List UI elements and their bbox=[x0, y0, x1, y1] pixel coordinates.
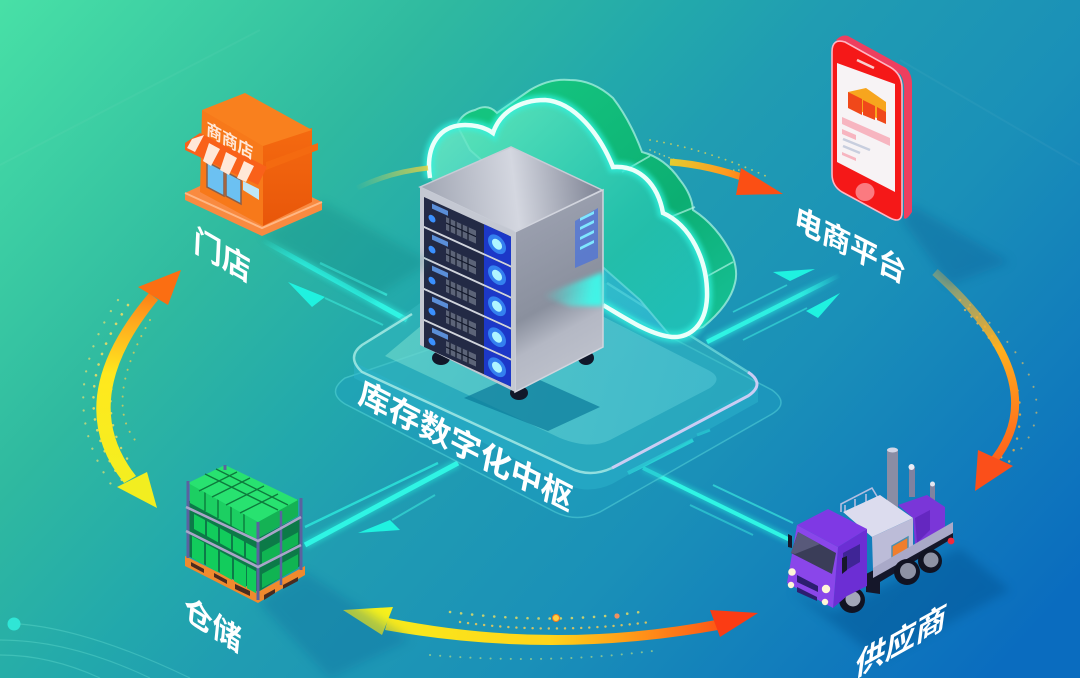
server top bbox=[420, 147, 602, 232]
arrow: cloud to e-commerce bbox=[707, 269, 840, 342]
rack top boxes front bbox=[190, 483, 258, 540]
arrow: warehouse to hub bbox=[305, 463, 458, 545]
truck headlights bbox=[788, 568, 830, 605]
rack lower boxes bbox=[192, 514, 298, 593]
decorative floor shading bbox=[0, 30, 1080, 165]
store awning bbox=[185, 133, 267, 185]
icon: warehouse rack bbox=[185, 465, 410, 678]
store shadow bbox=[262, 202, 430, 300]
rack shadow bbox=[258, 572, 410, 678]
truck box bbox=[843, 495, 913, 570]
store windows bbox=[207, 162, 259, 204]
arrow: warehouse to supplier bbox=[343, 607, 758, 645]
truck cab front bbox=[787, 525, 838, 608]
cloud extruded edge bbox=[457, 80, 736, 338]
phone front bbox=[832, 41, 902, 220]
phone earpiece bbox=[857, 60, 874, 68]
truck cab roof bbox=[797, 509, 867, 547]
orbit arrows bbox=[83, 140, 1037, 659]
store body left face bbox=[200, 110, 263, 226]
label: warehouse: 仓储 bbox=[182, 590, 243, 660]
arrow: platform to supplier bbox=[935, 272, 1015, 491]
platform lower plate bbox=[336, 295, 781, 518]
server units bbox=[424, 197, 511, 387]
cloud translucent fill bbox=[429, 100, 707, 337]
platform upper plate bbox=[354, 283, 757, 473]
truck stacks bbox=[887, 448, 935, 514]
label: hub title: 库存数字化中枢 bbox=[356, 374, 575, 518]
server feet bbox=[432, 351, 450, 365]
arrow: hub to supplier bbox=[628, 430, 793, 540]
store base bbox=[185, 165, 322, 236]
rack dark back bbox=[188, 500, 300, 592]
phone home button bbox=[856, 183, 874, 201]
phone shadow bbox=[902, 205, 1010, 285]
truck chassis bbox=[866, 530, 953, 594]
server glare bbox=[540, 272, 603, 306]
platform inset bbox=[385, 310, 717, 445]
truck cab side bbox=[833, 529, 867, 608]
cyan connection arrows bbox=[262, 240, 840, 545]
icon: truck bbox=[787, 448, 1010, 660]
truck tail light bbox=[948, 538, 954, 544]
truck windshield bbox=[791, 532, 836, 574]
server side LEDs bbox=[575, 208, 598, 268]
icon: cloud bbox=[429, 80, 736, 338]
store roof bbox=[202, 93, 312, 146]
truck wheels bbox=[839, 549, 942, 613]
icon: server rack bbox=[420, 147, 603, 400]
icon: corner dot and faint lines bbox=[0, 618, 190, 678]
panel: glass platform bbox=[336, 283, 781, 518]
arrow: hub to e-commerce bbox=[670, 162, 783, 195]
rack top boxes top bbox=[188, 465, 298, 522]
cloud glow outline bbox=[429, 100, 707, 337]
server front frame bbox=[420, 187, 515, 392]
arrow: store to hub bbox=[262, 240, 407, 325]
icon: store bbox=[185, 93, 430, 300]
phone screen gift bbox=[848, 88, 886, 124]
truck shadow bbox=[790, 548, 1010, 660]
label: e-commerce platform: 电商平台 bbox=[792, 200, 908, 291]
faded arc behind cloud bbox=[357, 168, 428, 188]
truck railing bbox=[841, 488, 878, 513]
phone screen rows bbox=[842, 117, 890, 161]
phone side bbox=[836, 36, 912, 219]
truck grille bbox=[797, 575, 818, 601]
truck purple tanks bbox=[898, 495, 945, 545]
store body right face bbox=[263, 128, 312, 226]
rack pallet bbox=[185, 556, 305, 603]
arrow: warehouse to store bbox=[96, 270, 181, 508]
rack frame bbox=[186, 465, 301, 600]
truck bed bbox=[873, 522, 953, 578]
truck side window bbox=[843, 544, 860, 572]
label: store: 门店 bbox=[193, 222, 251, 290]
truck mirrors bbox=[788, 534, 847, 574]
server shadow on platform bbox=[464, 372, 600, 431]
icon: phone bbox=[832, 36, 1010, 285]
server side bbox=[515, 190, 603, 392]
phone screen bbox=[837, 63, 895, 192]
speckles bbox=[83, 140, 1037, 659]
store sign text: 商商店 bbox=[206, 118, 254, 163]
